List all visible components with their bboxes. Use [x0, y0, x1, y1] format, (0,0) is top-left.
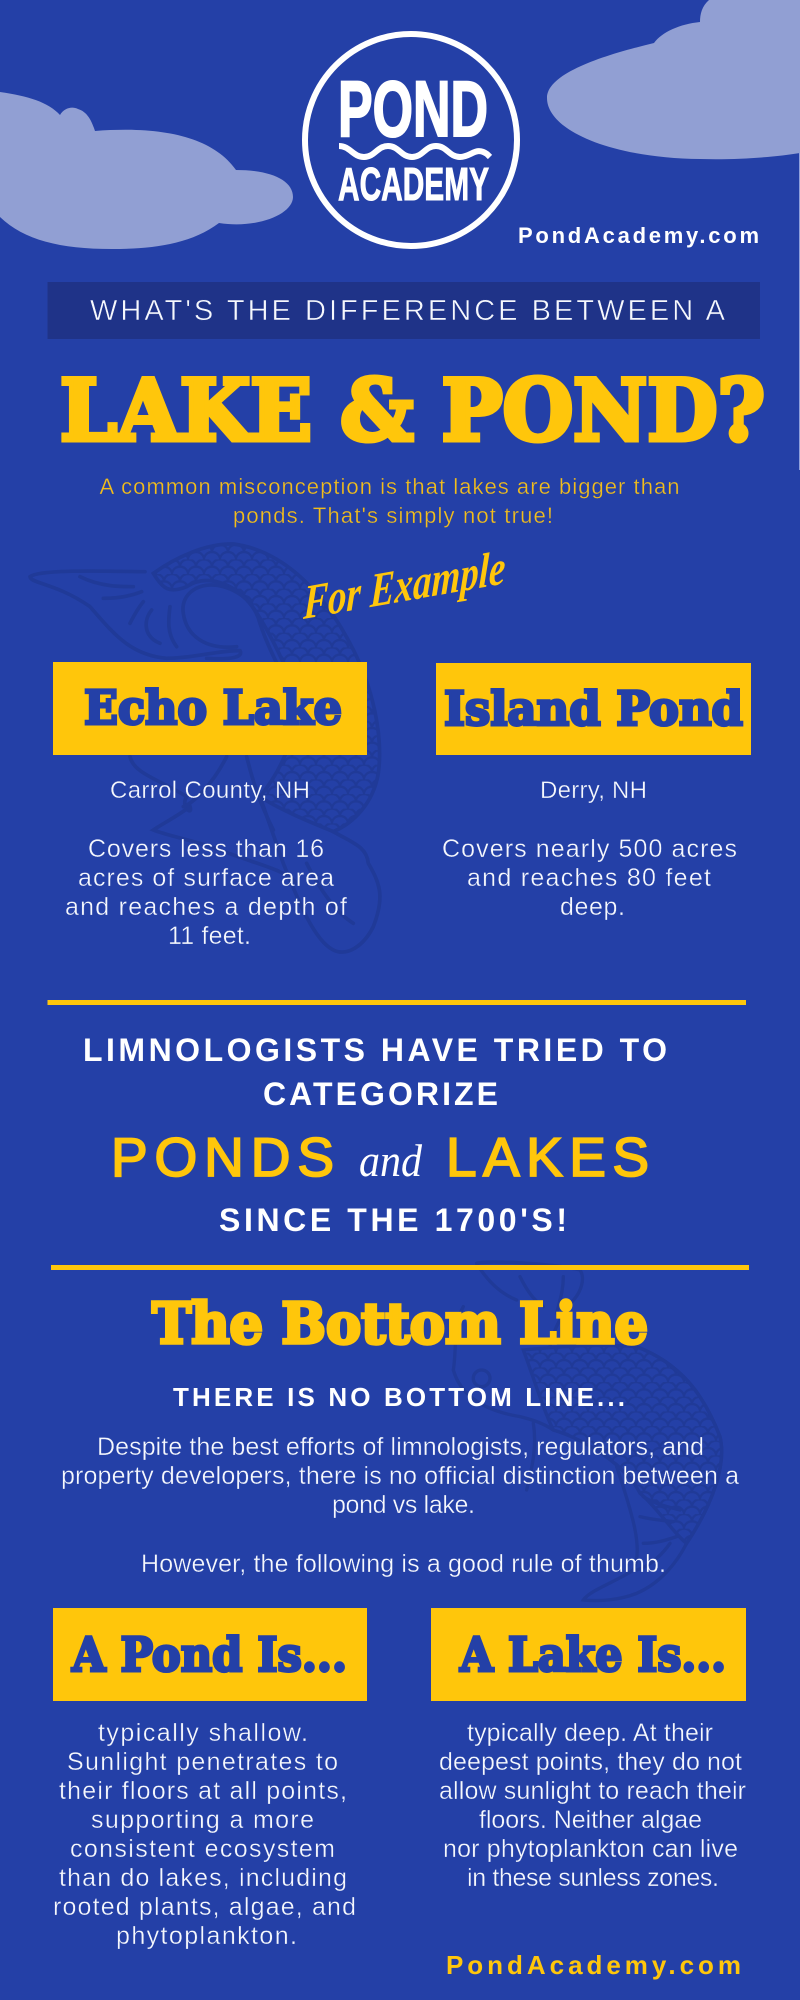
intro text [100, 474, 680, 528]
logo: Pond Academy [305, 34, 517, 246]
illustration: koi fish right [453, 1262, 722, 1601]
subheading: THERE IS NO BOTTOM LINE... [173, 1382, 625, 1412]
logo: Pond Academy: POND [338, 64, 488, 153]
main title: LAKE & POND? [60, 361, 765, 460]
heading: since the 1700s: SINCE THE 1700'S! [219, 1202, 567, 1238]
text: bottom line explanation: However, the following is a good rule of thumb. [141, 1550, 666, 1578]
website link bottom: PondAcademy.com [446, 1950, 741, 1980]
text: lake description: nor phytoplankton can live [443, 1835, 738, 1863]
text: Echo Lake facts: and reaches a depth of [65, 893, 347, 921]
title band [48, 282, 760, 339]
text: pond description: phytoplankton. [116, 1922, 297, 1950]
text: pond description [53, 1719, 356, 1950]
illustration: koi fish left [30, 544, 380, 952]
text: Echo Lake facts: Covers less than 16 [88, 835, 324, 863]
text: pond description: than do lakes, including [59, 1864, 347, 1892]
panel: A Pond Is heading: A Pond Is... [71, 1628, 347, 1683]
text: lake description: deepest points, they do not [439, 1748, 742, 1776]
text: Echo Lake facts: acres of surface area [78, 864, 334, 892]
text: pond description: supporting a more [91, 1806, 314, 1834]
panel: A Pond Is heading [53, 1608, 367, 1701]
text: pond description: rooted plants, algae, and [53, 1893, 356, 1921]
text: lake description: floors. Neither algae [479, 1806, 702, 1834]
text: Echo Lake facts [65, 777, 347, 950]
panel: Island Pond heading [436, 663, 751, 755]
heading: ponds and lakes [111, 1126, 649, 1188]
text: lake description: typically deep. At their [467, 1719, 713, 1747]
text: Island Pond facts: and reaches 80 feet [467, 864, 711, 892]
intro text: A common misconception is that lakes are bigger than [100, 474, 680, 499]
logo: Pond Academy: ACADEMY [338, 158, 489, 210]
icon: right cloud [547, 0, 800, 159]
text: bottom line explanation: pond vs lake. [332, 1491, 475, 1519]
heading: limnologists: CATEGORIZE [263, 1076, 498, 1112]
text: Island Pond facts: deep. [560, 893, 625, 921]
text: bottom line explanation: property developers, there is no official distinction between a [61, 1462, 739, 1490]
text: pond description: their floors at all points, [59, 1777, 347, 1805]
text: lake description: in these sunless zones. [467, 1864, 719, 1892]
heading: the bottom line: The Bottom Line [152, 1291, 648, 1357]
panel: Echo Lake heading [53, 662, 367, 755]
text: Echo Lake facts: Carrol County, NH [110, 777, 310, 804]
text: lake description: allow sunlight to reach their [439, 1777, 746, 1805]
text: bottom line explanation: Despite the best efforts of limnologists, regulators, and [97, 1433, 704, 1461]
text: Island Pond facts: Derry, NH [540, 777, 647, 804]
heading: limnologists: LIMNOLOGISTS HAVE TRIED TO [83, 1032, 667, 1068]
text: bottom line explanation [61, 1433, 739, 1578]
text: pond description: typically shallow. [98, 1719, 308, 1747]
panel: Island Pond heading: Island Pond [444, 682, 743, 737]
text: Echo Lake facts: 11 feet. [168, 922, 251, 950]
text: pond description: consistent ecosystem [70, 1835, 335, 1863]
panel: A Lake Is heading [431, 1608, 746, 1701]
panel: A Lake Is heading: A Lake Is... [459, 1628, 726, 1683]
icon: left cloud [0, 92, 293, 249]
heading: ponds and lakes: and [359, 1135, 423, 1186]
text: lake description [439, 1719, 746, 1892]
text: pond description: Sunlight penetrates to [67, 1748, 338, 1776]
text: Island Pond facts [442, 777, 737, 921]
intro text: ponds. That's simply not true! [233, 503, 553, 528]
text: Island Pond facts: Covers nearly 500 acres [442, 835, 737, 863]
title band: WHAT'S THE DIFFERENCE BETWEEN A [90, 295, 726, 327]
panel: Echo Lake heading: Echo Lake [84, 681, 342, 736]
website link top: PondAcademy.com [518, 223, 759, 248]
heading: ponds and lakes: PONDS [111, 1126, 334, 1188]
for example script: For Example [302, 541, 506, 630]
heading: ponds and lakes: LAKES [446, 1126, 649, 1188]
heading: limnologists [83, 1032, 667, 1112]
